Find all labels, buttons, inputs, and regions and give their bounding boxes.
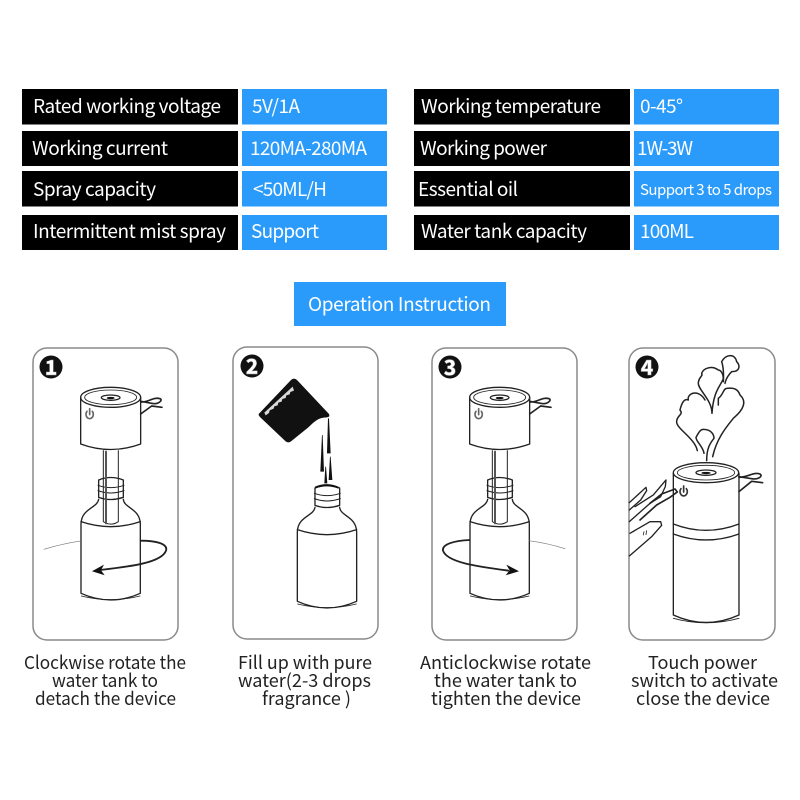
spec row: spray capacity: Spray capacity (33, 175, 156, 202)
caption: step 3 (420, 649, 591, 711)
spec row: essential oil: Essential oil (418, 175, 518, 202)
caption: step 1: Clockwise rotate the (24, 649, 186, 675)
spec row: rated working voltage: 5V/1A (252, 92, 300, 119)
spec row: water tank capacity: 100ML (640, 217, 694, 244)
caption: step 2: Fill up with pure (238, 649, 372, 675)
spec row: rated working voltage (22, 89, 387, 124)
caption: step 2 (238, 649, 372, 711)
spec row: working temperature (414, 89, 779, 124)
panel: step 3 (432, 348, 577, 640)
spec row: working power (414, 131, 779, 166)
spec row: working temperature: Working temperature (421, 92, 601, 119)
spec row: spray capacity (22, 171, 387, 206)
spec row: working power: 1W-3W (637, 134, 693, 161)
illustration: pouring water into bottle (259, 379, 357, 608)
caption: step 4 (631, 649, 778, 711)
spec row: spray capacity: <50ML/H (253, 175, 327, 202)
spec row: working current: 120MA-280MA (250, 134, 367, 161)
step number 3 (438, 352, 462, 382)
heading: operation instruction: Operation Instruction (308, 290, 491, 317)
spec table: right (414, 89, 779, 250)
caption: step 3: tighten the device (431, 685, 581, 711)
step number 1: 1 (45, 352, 57, 382)
caption: step 1 (24, 649, 186, 711)
step number 4: 4 (641, 352, 654, 382)
spec row: rated working voltage: Rated working voltage (33, 92, 221, 119)
step number 4 (636, 352, 658, 382)
spec row: working current: Working current (32, 134, 168, 161)
spec row: essential oil (414, 171, 779, 206)
mist (677, 356, 744, 461)
caption: step 4: close the device (636, 685, 770, 711)
illustration: device lifted from bottle, clockwise arrow (44, 387, 166, 600)
spec row: intermittent mist spray: Intermittent mist spray (33, 217, 226, 244)
caption: step 1: detach the device (35, 685, 176, 711)
spec row: intermittent mist spray (22, 215, 387, 250)
panel: step 4 (629, 348, 775, 640)
caption: step 3: Anticlockwise rotate (420, 649, 591, 675)
step number 2: 2 (246, 351, 258, 381)
caption: step 1: water tank to (52, 667, 158, 693)
spec table: left (22, 89, 387, 250)
panel: step 2 (233, 347, 378, 639)
spec row: essential oil: Support 3 to 5 drops (640, 179, 772, 200)
heading: operation instruction (294, 282, 506, 326)
caption: step 4: switch to activate (631, 667, 778, 693)
step number 1 (40, 352, 62, 382)
caption: step 4: Touch power (648, 649, 758, 675)
step number 3: 3 (444, 352, 456, 382)
spec row: working power: Working power (420, 134, 548, 161)
illustration: assembled diffuser with mist and hand (629, 356, 763, 623)
spec row: working temperature: 0-45° (640, 92, 683, 119)
illustration: device over bottle, anticlockwise arrow (443, 387, 565, 600)
caption: step 2: fragrance ) (262, 685, 351, 711)
step number 2 (240, 351, 264, 381)
spec row: water tank capacity: Water tank capacity (421, 217, 587, 244)
caption: step 2: water(2-3 drops (238, 667, 371, 693)
caption: step 3: the water tank to (434, 667, 577, 693)
device (673, 463, 763, 623)
panel: step 1 (33, 348, 178, 640)
spec row: working current (22, 131, 387, 166)
spec row: intermittent mist spray: Support (251, 217, 319, 244)
hand (629, 480, 677, 556)
spec row: water tank capacity (414, 215, 779, 250)
